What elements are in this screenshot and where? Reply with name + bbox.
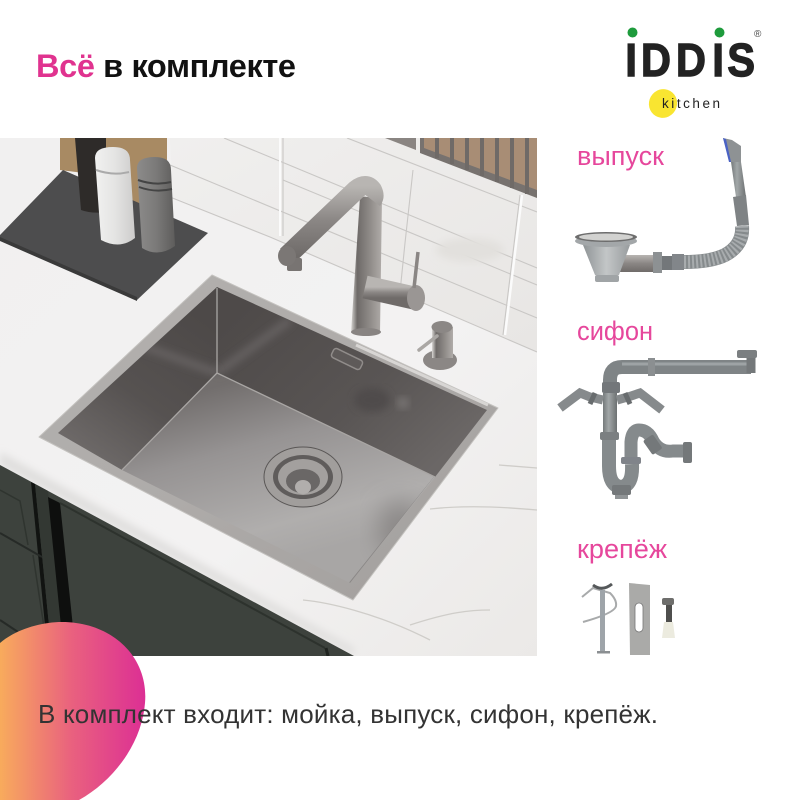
grey shaker bbox=[137, 157, 175, 253]
faucet bbox=[278, 186, 425, 336]
middle nut bbox=[600, 432, 619, 440]
bottom nut bbox=[612, 485, 631, 495]
cabinet bbox=[0, 465, 354, 656]
overflow head bbox=[723, 138, 741, 162]
plate bbox=[629, 583, 650, 655]
faucet handle bbox=[365, 287, 414, 298]
label: сифон: сифон bbox=[577, 316, 653, 346]
screw bbox=[662, 598, 675, 638]
corrugated hose bbox=[684, 226, 742, 262]
tray edge bbox=[0, 237, 137, 301]
logo green dots bbox=[628, 28, 724, 38]
sink back wall bbox=[217, 287, 487, 477]
tiled wall bbox=[170, 138, 537, 352]
wooden board bbox=[60, 138, 167, 205]
basin reflections bbox=[140, 320, 435, 583]
drain bbox=[264, 447, 342, 507]
kitchen wordmark: kitchen bbox=[662, 96, 720, 111]
title: Всё в комплекте bbox=[36, 48, 296, 84]
U pipe bbox=[631, 430, 684, 457]
caption: В комплект входит: мойка, выпуск, сифон, крепёж. bbox=[38, 699, 658, 729]
countertop bbox=[0, 138, 537, 656]
logo wordmark: IDDIS bbox=[625, 35, 755, 87]
outlet pipes bbox=[620, 255, 654, 272]
angled nut bbox=[643, 434, 663, 455]
registered mark: ® bbox=[754, 29, 762, 40]
label: выпуск: выпуск bbox=[577, 141, 664, 171]
label: крепёж: крепёж bbox=[577, 534, 667, 564]
part: fasteners bbox=[582, 583, 675, 655]
yellow blob bbox=[644, 84, 682, 123]
upper nut bbox=[602, 382, 620, 393]
sink rim bbox=[39, 275, 498, 600]
flange bbox=[575, 235, 637, 247]
door gap bbox=[31, 482, 48, 624]
window grill bbox=[385, 138, 537, 198]
overflow tube bbox=[731, 162, 746, 197]
cone body bbox=[583, 245, 630, 275]
sink bbox=[39, 275, 498, 600]
overflow blue edge bbox=[723, 138, 731, 162]
right nut bbox=[621, 457, 641, 464]
white shaker bbox=[95, 147, 135, 245]
marble veins bbox=[303, 465, 537, 640]
overflow nut bbox=[733, 195, 749, 226]
slate tray bbox=[0, 170, 208, 300]
top right cap bbox=[746, 356, 756, 373]
gradient circle bbox=[0, 622, 145, 800]
trap bowl bbox=[609, 440, 632, 487]
part: drain outlet bbox=[575, 138, 749, 282]
side arm right bbox=[617, 393, 662, 410]
soap dispenser bbox=[419, 321, 457, 370]
top band bbox=[648, 358, 655, 376]
side arm left bbox=[560, 393, 603, 408]
top pipe and elbow bbox=[610, 367, 751, 388]
sink floor bbox=[122, 374, 434, 518]
clamp bbox=[582, 584, 616, 654]
oil bottle bbox=[75, 138, 106, 213]
black reveal bbox=[48, 497, 72, 622]
sink left wall bbox=[58, 287, 217, 470]
end nut bbox=[683, 442, 692, 463]
overflow bbox=[330, 347, 364, 371]
part: siphon bbox=[560, 350, 757, 499]
vertical pipe bbox=[603, 393, 617, 435]
kitchen sink photo bbox=[0, 138, 537, 656]
rim highlight near faucet bbox=[356, 345, 488, 405]
logo: IDDIS kitchen bbox=[625, 28, 762, 123]
counter edge shading bbox=[0, 452, 354, 656]
door stile bbox=[35, 484, 60, 622]
